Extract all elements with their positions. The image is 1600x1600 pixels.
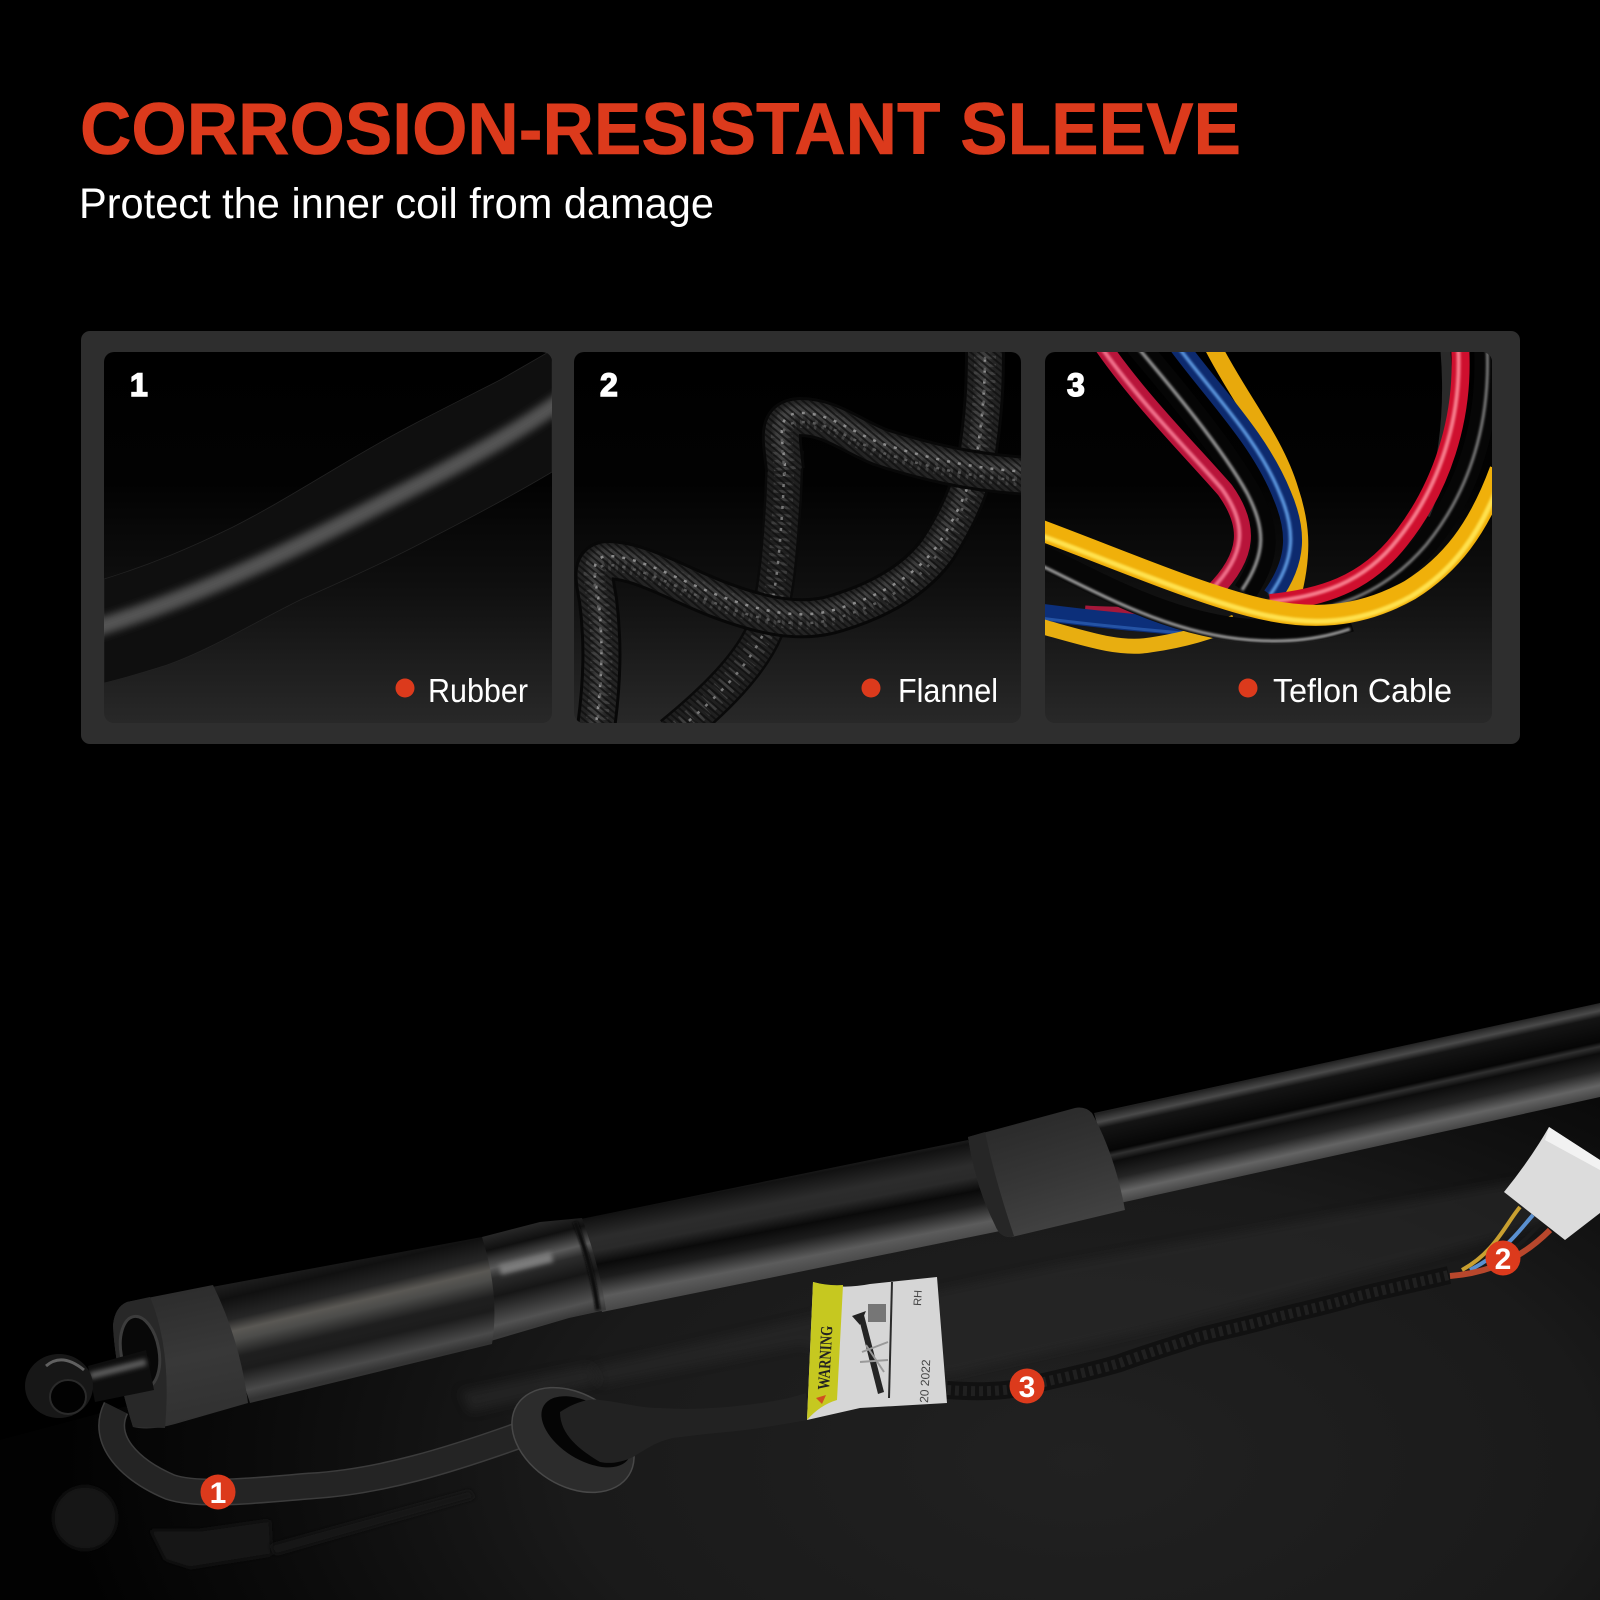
lower black wire xyxy=(1040,556,1350,632)
badge 1: 1 xyxy=(210,1477,226,1510)
badge 2: 2 xyxy=(1495,1243,1511,1276)
panel 3: teflon cable xyxy=(1040,343,1502,723)
neck ring xyxy=(575,1222,598,1310)
main yellow wire xyxy=(1040,470,1500,615)
warning label xyxy=(807,1277,947,1420)
upper-right red wire xyxy=(1270,345,1461,603)
lower yellow wire xyxy=(1040,622,1235,646)
flannel sleeve right section xyxy=(947,1275,1449,1391)
product: electric actuator strut xyxy=(25,1003,1600,1514)
floor gradient background xyxy=(0,1060,1600,1600)
badge 3 xyxy=(1010,1368,1044,1404)
neck highlight xyxy=(500,1257,552,1270)
warning label: 20 2022 xyxy=(917,1359,933,1403)
badge 3: 3 xyxy=(1019,1371,1035,1404)
panel: material comparison xyxy=(81,331,1520,744)
rubber tube image xyxy=(90,350,565,683)
warning label: RH xyxy=(912,1290,925,1306)
cable A xyxy=(594,339,985,740)
upper-left yellow wire xyxy=(1212,345,1300,598)
reflection on floor xyxy=(53,1170,1600,1568)
upper-right dark wires xyxy=(1425,345,1447,515)
middle tube section xyxy=(576,1140,1005,1312)
upper-left black wire xyxy=(1236,564,1272,596)
dot and label: flannel xyxy=(862,672,998,709)
flannel sleeve xyxy=(560,1393,808,1463)
main tube section xyxy=(212,1237,494,1403)
lower blue wire xyxy=(1040,612,1215,630)
upper-left blue wire xyxy=(1178,345,1293,596)
lower red wire xyxy=(1085,610,1150,614)
colored wires image xyxy=(1040,343,1502,646)
upper-left red wire xyxy=(1102,345,1242,592)
ball socket xyxy=(25,1354,93,1418)
warning label: WARNING xyxy=(814,1325,836,1390)
wires to connector xyxy=(1450,1207,1550,1276)
outer tube section xyxy=(1094,1003,1600,1203)
badge 2 xyxy=(1486,1240,1520,1276)
number 1: 1 xyxy=(130,367,148,403)
neck section xyxy=(460,1218,606,1350)
rubber grommet xyxy=(493,1366,653,1514)
end cap xyxy=(113,1285,248,1428)
dot and label: rubber: Rubber xyxy=(428,672,528,709)
braided cables image xyxy=(594,339,1030,740)
dot and label: teflon cable: Teflon Cable xyxy=(1273,672,1452,709)
subtitle: Protect the inner coil from damage xyxy=(79,180,714,228)
piston rod xyxy=(88,1350,154,1402)
panel 1: rubber xyxy=(90,350,565,723)
number 2: 2 xyxy=(600,367,618,403)
title: CORROSION-RESISTANT SLEEVE xyxy=(80,89,1241,170)
rear strand of cable B xyxy=(672,450,785,735)
front strand of cable B xyxy=(781,411,1030,481)
dot and label: flannel: Flannel xyxy=(898,672,998,709)
badge 1 xyxy=(200,1474,236,1510)
collar xyxy=(968,1108,1125,1237)
panel 2: flannel xyxy=(574,339,1030,740)
rubber cable xyxy=(112,1408,520,1492)
number 3: 3 xyxy=(1067,367,1085,403)
connector xyxy=(1504,1127,1600,1240)
